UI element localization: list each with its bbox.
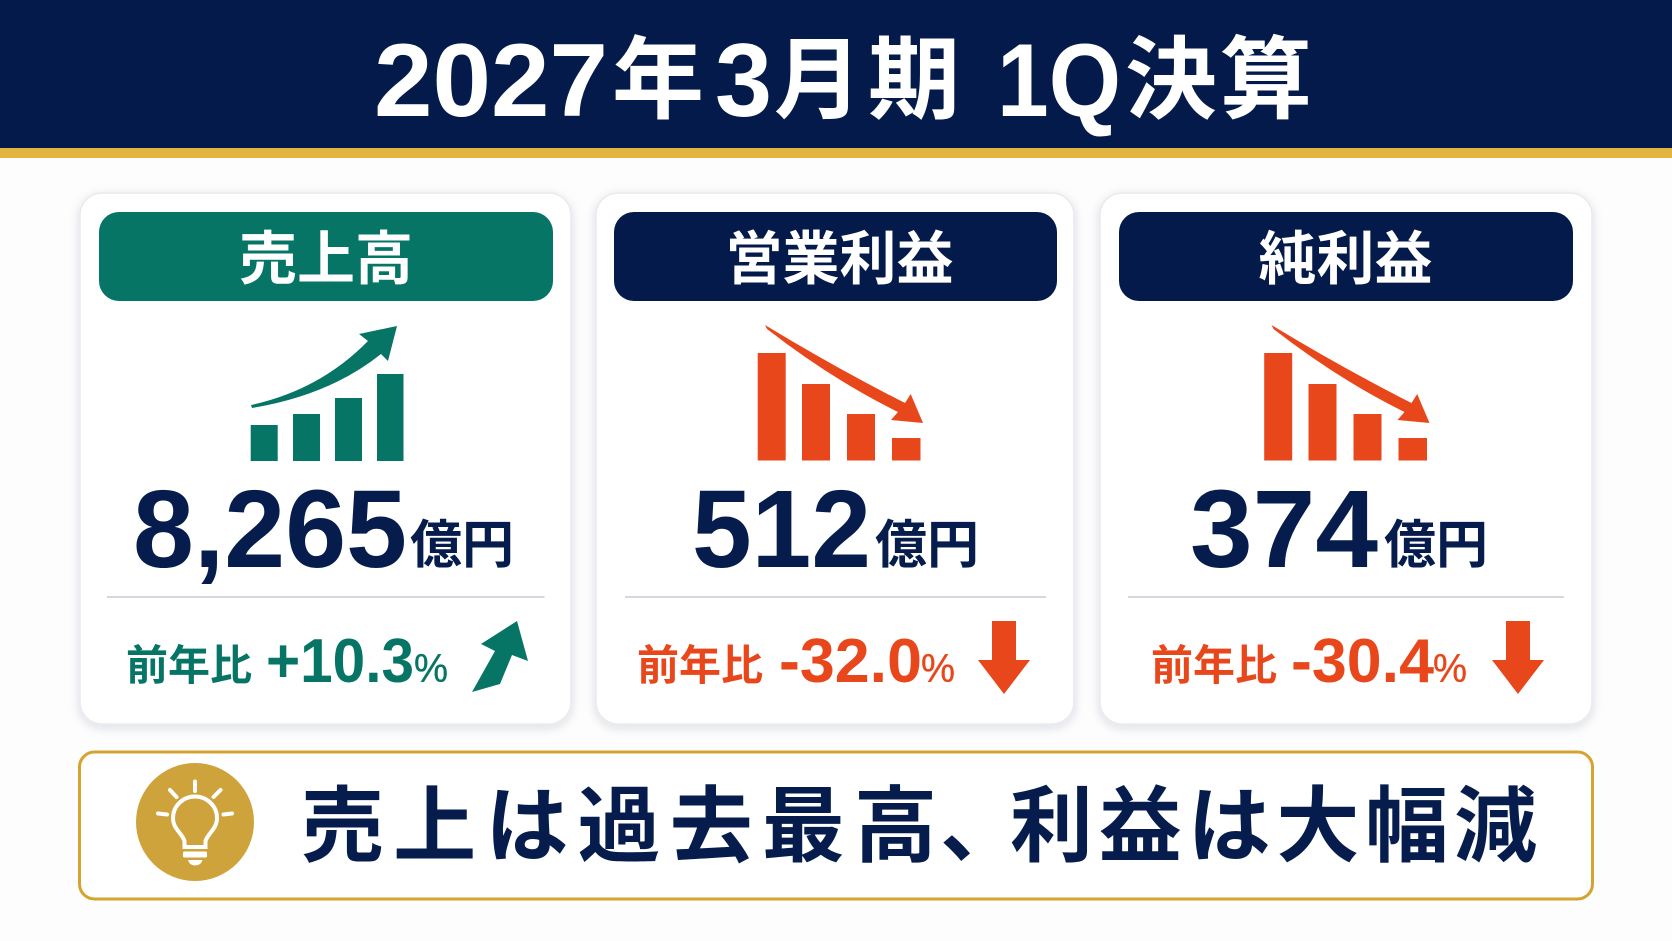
year-on-year: net profit: -30.4 (1291, 627, 1435, 696)
summary text: 売上は過去最高 (301, 759, 937, 879)
panel heading: operating profit (614, 212, 1057, 301)
panel: operating profit (596, 193, 1074, 724)
icon: falling bar chart with arrow (1264, 325, 1430, 460)
arrow: down (978, 621, 1030, 694)
value: net profit: 億円 (1384, 503, 1488, 578)
panel heading: revenue (99, 212, 553, 301)
panel: revenue (80, 193, 571, 724)
panel heading: net profit (1119, 212, 1573, 301)
title: 年 (612, 7, 704, 137)
year-on-year: net profit (1151, 627, 1467, 696)
panel heading: operating profit: 営業利益 (726, 212, 954, 296)
arrow: up (472, 621, 528, 692)
title: 3 (715, 23, 772, 139)
year-on-year: operating profit (637, 627, 955, 696)
year-on-year: revenue: +10.3 (266, 627, 414, 696)
value: operating profit: 512 (692, 468, 871, 591)
title: 決 (1125, 7, 1217, 137)
year-on-year: net profit: % (1433, 647, 1467, 691)
panel heading: revenue: 売上高 (239, 212, 413, 296)
panel heading: net profit: 純利益 (1258, 212, 1433, 296)
value: revenue: 8,265 (133, 468, 407, 591)
summary text (301, 759, 1537, 879)
title: 1Q (997, 23, 1121, 139)
title: 期 (868, 7, 960, 137)
value: operating profit (692, 468, 979, 591)
icon: rising bar chart with arrow (251, 326, 404, 461)
value: net profit (1190, 468, 1488, 591)
panel: net profit (1100, 193, 1592, 724)
value: revenue: 億円 (410, 503, 514, 578)
title: 2027 (374, 23, 608, 139)
summary text: 、 (940, 759, 1023, 879)
arrow: down (1492, 621, 1544, 694)
value: net profit: 374 (1190, 468, 1378, 591)
year-on-year: net profit: 前年比 (1151, 632, 1277, 693)
year-on-year: operating profit: -32.0 (779, 627, 922, 696)
callout: summary (80, 752, 1592, 899)
year-on-year: operating profit: 前年比 (637, 632, 763, 693)
year-on-year: revenue (126, 627, 448, 696)
header banner (0, 0, 1672, 158)
year-on-year: revenue: % (414, 647, 448, 691)
title: 算 (1220, 7, 1312, 137)
year-on-year: operating profit: % (921, 647, 955, 691)
icon: light bulb (136, 763, 254, 881)
summary text: 利益は大幅減 (1010, 759, 1537, 879)
value: operating profit: 億円 (875, 503, 979, 578)
title (374, 7, 1312, 139)
year-on-year: revenue: 前年比 (126, 632, 252, 693)
icon: falling bar chart with arrow (758, 325, 923, 460)
title: 月 (774, 7, 862, 137)
